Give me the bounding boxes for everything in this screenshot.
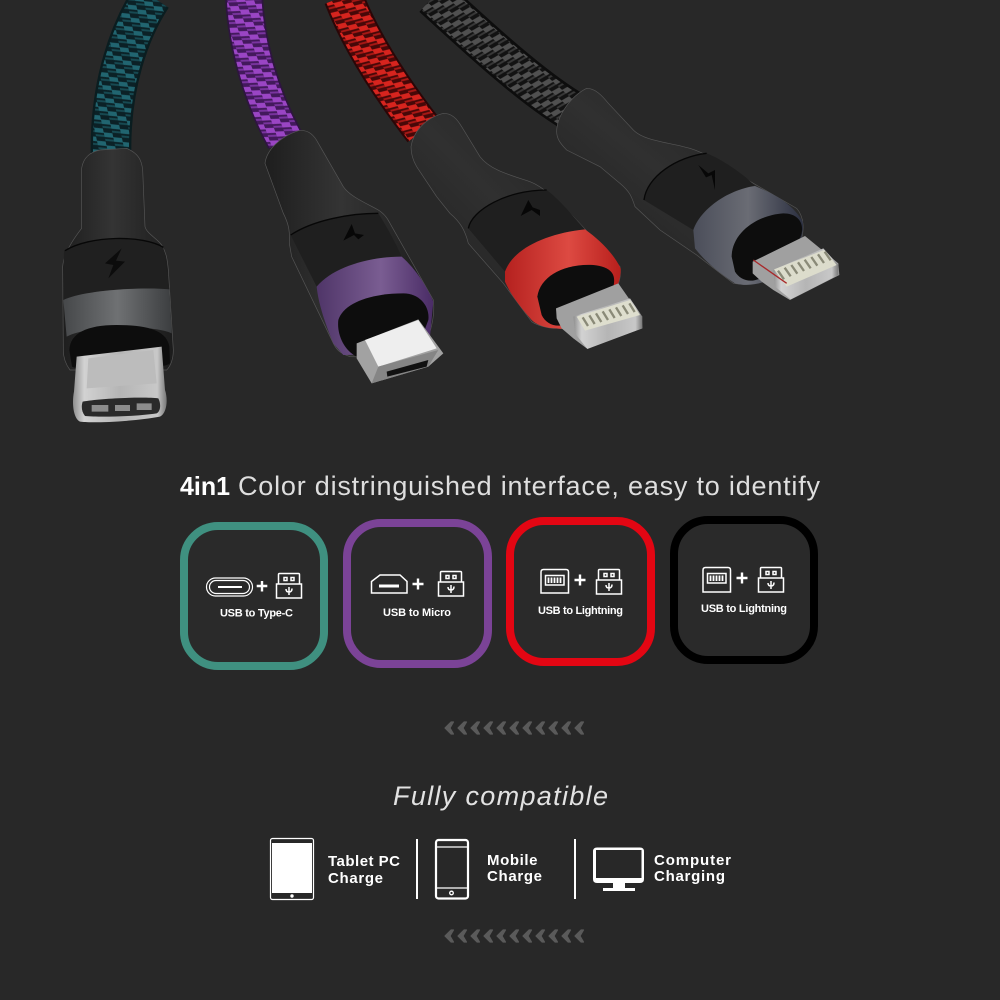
contact pins (583, 303, 635, 326)
plug body (357, 319, 443, 383)
plug shell (73, 347, 167, 422)
tablet screen (272, 843, 312, 893)
red ring (505, 229, 621, 329)
red braided cord (343, 0, 423, 130)
plug tip (573, 298, 642, 349)
computer label: Computer (654, 852, 731, 869)
tablet home button (290, 894, 294, 898)
black connector face (338, 293, 429, 357)
plug body (556, 283, 642, 348)
monitor frame (593, 848, 644, 883)
purple braided cord (244, 0, 285, 140)
plug contacts (92, 403, 152, 412)
teal cable strain relief (63, 148, 173, 370)
black card frame (674, 520, 814, 660)
computer label second line: Charging (654, 868, 725, 885)
divider (416, 839, 418, 899)
purple ring (317, 257, 433, 355)
icon: computer monitor (593, 848, 644, 891)
icon: lightning port (703, 568, 730, 592)
gray ring (63, 288, 172, 337)
icon: micro usb port (372, 575, 407, 593)
teal braided cord (111, 0, 152, 153)
collar shade (644, 153, 755, 230)
purple card frame (347, 523, 488, 664)
icon: usb plug (276, 574, 302, 598)
heading (180, 471, 820, 501)
red stripe (753, 260, 787, 283)
icon: tablet (270, 838, 314, 900)
black cable with slate connector (433, 0, 839, 300)
card: USB to Micro (347, 523, 488, 664)
black strain relief (557, 88, 803, 284)
plug top (365, 320, 437, 367)
heading bold lead: 4in1 (180, 471, 230, 501)
plus sign (574, 574, 586, 586)
contact pad (577, 300, 640, 331)
icon: mobile phone (436, 840, 468, 898)
icon: type-c port (206, 578, 252, 596)
black connector face (69, 325, 170, 370)
micro usb plug (357, 319, 443, 383)
collar seam (468, 190, 547, 228)
contact pins (778, 252, 831, 279)
type-c plug (73, 347, 167, 422)
heading text: Color distringuished interface, easy to identify (238, 471, 820, 501)
lightning plug (556, 283, 642, 349)
label: USB to Lightning (701, 603, 787, 615)
collar shade (468, 190, 585, 272)
icon: usb plug (596, 570, 622, 594)
plug front (372, 350, 438, 383)
plug slot (387, 360, 428, 377)
black braided cord (433, 0, 570, 110)
collar shade (291, 213, 402, 287)
purple cable strain relief (265, 130, 434, 357)
plus sign (257, 581, 267, 592)
slate ring (693, 186, 803, 285)
card: USB to Lightning black (674, 520, 814, 660)
black connector face (732, 213, 802, 281)
lightning bolt mark (343, 224, 364, 241)
monitor stand (603, 883, 635, 891)
label: USB to Micro (383, 607, 451, 619)
teal card frame (184, 526, 324, 666)
port outline (372, 575, 407, 593)
plus sign (736, 572, 748, 584)
lightning bolt mark (105, 248, 125, 278)
red card frame (510, 521, 651, 662)
card: USB to Lightning red (510, 521, 651, 662)
mobile label second line: Charge (487, 868, 542, 885)
port slot (379, 584, 399, 588)
contact pad (774, 250, 837, 287)
tablet label: Tablet PC (328, 853, 400, 870)
subheading: Fully compatible (393, 781, 608, 811)
plug tip (773, 248, 838, 299)
icon: usb plug (438, 572, 464, 596)
red cable with lightning connector (343, 0, 642, 349)
label: USB to Type-C (220, 608, 293, 620)
purple cable with micro connector (244, 0, 443, 383)
tablet label second line: Charge (328, 870, 383, 887)
chevron row top (445, 722, 584, 734)
plug top panel (87, 350, 157, 388)
collar shade (63, 238, 169, 300)
collar seam (65, 238, 163, 251)
chevron row bottom (445, 930, 584, 942)
red cable strain relief (411, 113, 620, 328)
collar seam (291, 213, 378, 235)
mobile label: Mobile (487, 852, 538, 869)
icon: lightning port (541, 570, 568, 593)
compatibility row (270, 838, 731, 900)
teal cable with type-c connector (63, 0, 173, 422)
divider (574, 839, 576, 899)
plug opening (82, 398, 160, 417)
lightning bolt mark (521, 200, 540, 216)
label: USB to Lightning (538, 605, 623, 617)
tablet outline (270, 838, 314, 900)
plug body (753, 236, 839, 300)
plus sign (412, 578, 424, 590)
lightning plug (753, 236, 839, 300)
collar seam (644, 153, 707, 200)
card: USB to Type-C (184, 526, 324, 666)
black connector face (537, 265, 614, 326)
icon: usb plug (758, 568, 784, 592)
lightning bolt mark (698, 165, 715, 190)
